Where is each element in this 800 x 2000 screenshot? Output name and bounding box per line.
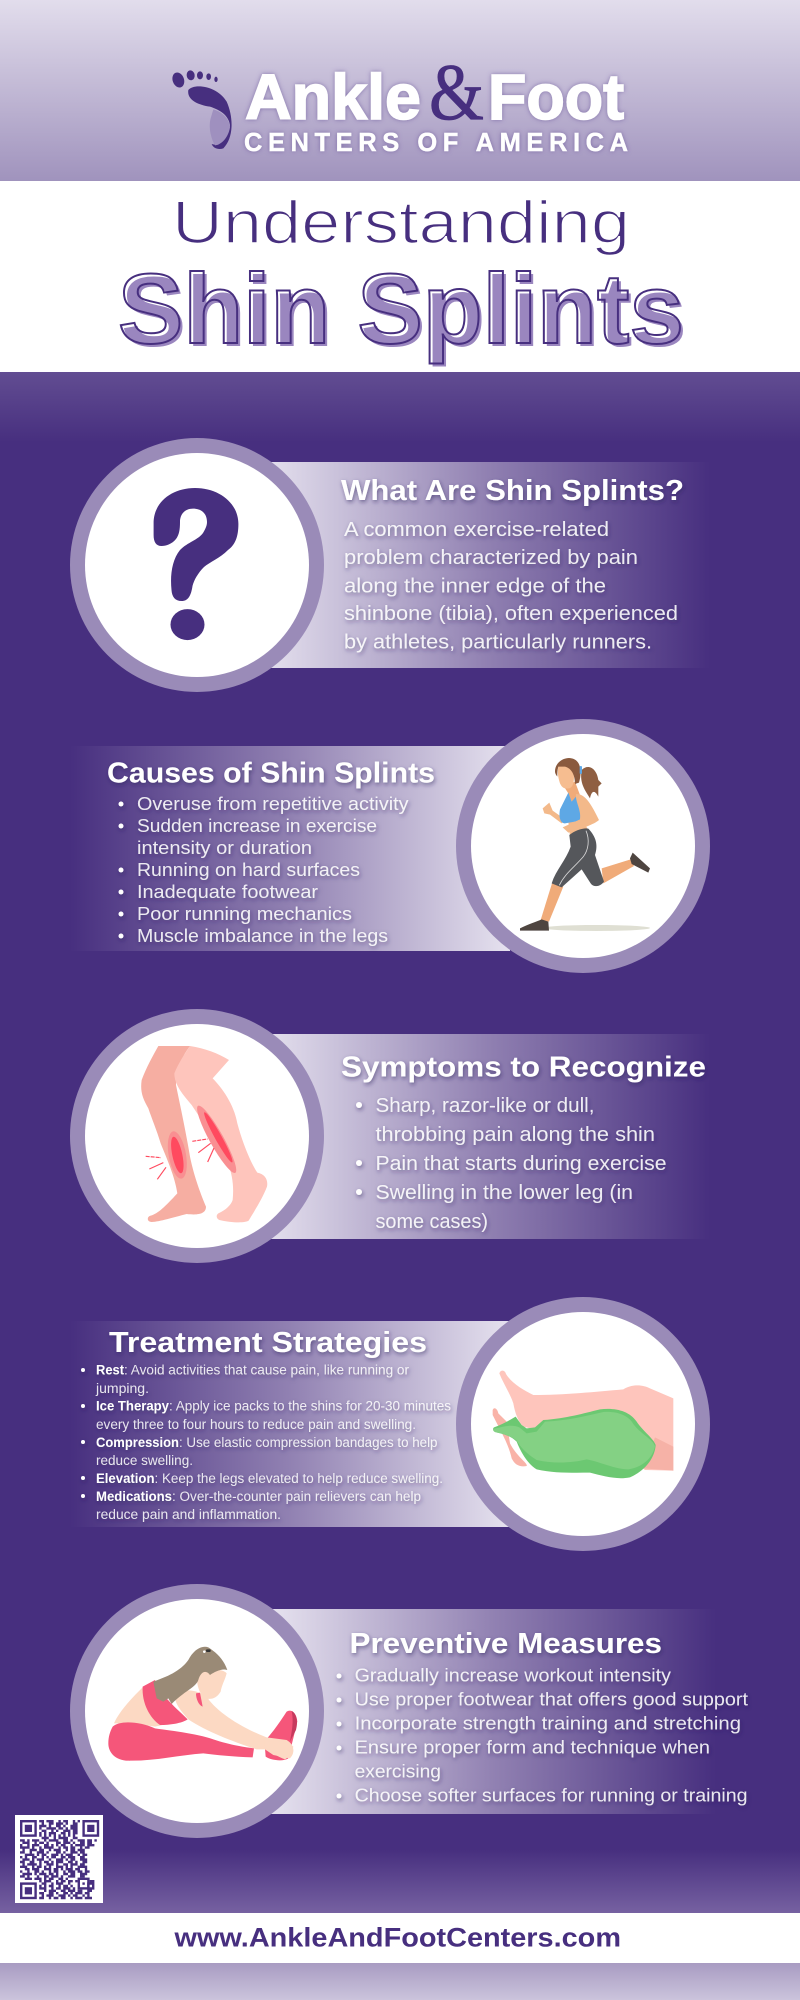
description: along the inner edge of the [344,576,606,598]
heading: Treatment Strategies [109,1327,427,1359]
treatment list: Ice Therapy [96,1399,169,1414]
causes list: Sudden increase in exercise [137,816,377,836]
treatment list: Elevation [96,1471,154,1486]
heading: What Are Shin Splints? [341,475,684,507]
circle with question mark icon [70,438,324,692]
heading: Causes of Shin Splints [107,758,435,790]
description: A common exercise-related [344,519,609,541]
logo wordmark: CENTERS OF AMERICA [244,129,628,157]
causes list: Muscle imbalance in the legs [137,926,388,946]
treatment list: Medications [96,1489,172,1504]
bottom band [0,1963,800,2000]
panel: what are shin splints [70,438,710,692]
treatment list: : Keep the legs elevated to help reduce swelling. [154,1471,443,1486]
treatment list: jumping. [95,1381,149,1396]
QR code [15,1815,103,1903]
circle with stretching illustration [70,1584,324,1838]
causes list: Inadequate footwear [137,882,318,902]
band [250,1609,716,1814]
circle with runner illustration [456,719,710,973]
prevention list: Gradually increase workout intensity [355,1666,671,1686]
title: Understanding: Understanding [172,189,630,256]
logo wordmark: Ankle [245,61,421,133]
band [70,1321,510,1527]
description: problem characterized by pain [344,547,638,569]
heading: Preventive Measures [350,1628,662,1660]
circle with ice pack illustration [456,1297,710,1551]
treatment list: : Use elastic compression bandages to help [179,1435,438,1450]
prevention list: Incorporate strength training and stretching [355,1714,741,1734]
treatment list: every three to four hours to reduce pain and swelling. [96,1417,416,1432]
description: shinbone (tibia), often experienced [344,603,678,625]
symptoms list: throbbing pain along the shin [376,1124,655,1146]
title background [0,181,800,372]
causes list: intensity or duration [137,838,312,858]
panel: treatment [70,1297,710,1551]
icon: footprint [170,70,232,149]
causes list: Running on hard surfaces [137,860,360,880]
symptoms list: Pain that starts during exercise [376,1153,666,1175]
footer URL bar [0,1913,800,1963]
symptoms list: some cases) [376,1211,488,1233]
footer URL bar: www.AnkleAndFootCenters.com [173,1923,621,1953]
treatment list: : Avoid activities that cause pain, like running or [124,1363,409,1378]
panel: symptoms [70,1009,710,1263]
symptoms list: Sharp, razor-like or dull, [376,1095,594,1117]
description [344,519,678,654]
circle with legs illustration [70,1009,324,1263]
prevention list [336,1666,748,1806]
treatment list: Compression [96,1435,179,1450]
logo wordmark: Foot [488,61,624,133]
panel: causes [70,719,710,973]
main purple background [0,372,800,1913]
prevention list: Use proper footwear that offers good support [355,1690,748,1710]
title: Shin Splints: Shin Splints [121,256,687,367]
title panel [0,181,800,372]
treatment list: reduce swelling. [96,1453,193,1468]
header band [0,0,800,181]
symptoms list: Swelling in the lower leg (in [376,1182,633,1204]
prevention list: exercising [355,1762,441,1782]
symptoms list [356,1095,666,1233]
panel: prevention [70,1584,748,1838]
prevention list: Ensure proper form and technique when [355,1738,710,1758]
logo wordmark [244,61,628,157]
treatment list [81,1363,451,1522]
treatment list: : Apply ice packs to the shins for 20-30 minutes [169,1399,451,1414]
causes list [118,794,408,946]
band [250,462,710,668]
title: Shin Splints: Shin Splints [118,253,684,364]
prevention list: Choose softer surfaces for running or training [355,1786,748,1806]
treatment list: reduce pain and inflammation. [96,1507,281,1522]
causes list: Overuse from repetitive activity [137,794,408,814]
causes list: Poor running mechanics [137,904,352,924]
logo ampersand: & [429,49,484,137]
description: by athletes, particularly runners. [344,632,652,654]
treatment list: : Over-the-counter pain relievers can help [172,1489,421,1504]
heading: Symptoms to Recognize [341,1052,706,1084]
band [250,1034,710,1239]
treatment list: Rest [96,1363,124,1378]
logo [170,49,628,157]
band [70,746,510,951]
